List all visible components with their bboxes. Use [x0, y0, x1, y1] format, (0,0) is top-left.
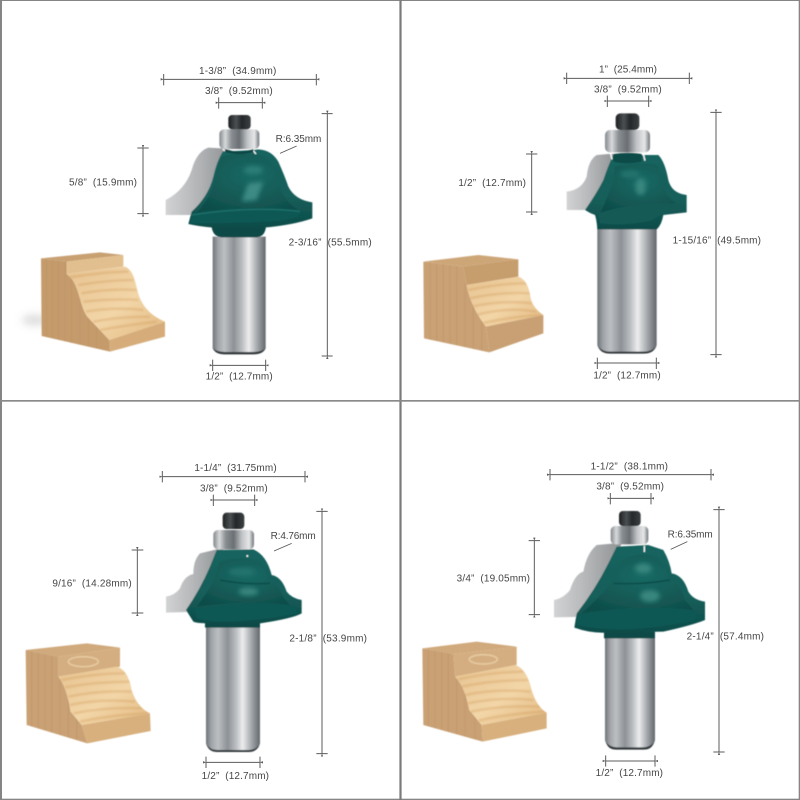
overall width dimension: [567, 64, 689, 84]
wood sample: [26, 643, 151, 745]
panel: top-left router bit: [22, 66, 372, 383]
bearing dimension: 3/8” (9.52mm): [205, 86, 273, 97]
wood sample: [22, 252, 165, 352]
bearing dimension: 3/8” (9.52mm): [200, 483, 268, 494]
cut height dimension: 1/2” (12.7mm): [458, 178, 526, 189]
cut height dimension: [457, 541, 540, 615]
bearing dimension: 3/8” (9.52mm): [596, 482, 664, 493]
bearing dimension: [205, 86, 273, 109]
panel: top-right router bit: [423, 64, 761, 381]
overall width dimension: [550, 461, 711, 480]
router bit: [567, 113, 687, 354]
bearing dimension: [596, 482, 664, 504]
total height dimension: [289, 114, 372, 356]
overall width dimension: [164, 66, 316, 85]
radius callout: R:6.35mm: [668, 529, 713, 540]
panel: bottom-left router bit: [26, 463, 367, 782]
cut height dimension: 5/8” (15.9mm): [69, 177, 137, 188]
shank dimension: 1/2” (12.7mm): [593, 370, 661, 381]
cut height dimension: 3/4” (19.05mm): [457, 574, 530, 585]
overall width dimension: 1” (25.4mm): [599, 64, 657, 75]
router bit: [554, 511, 705, 750]
radius callout: [668, 529, 713, 549]
total height dimension: [673, 112, 761, 355]
cut height dimension: [458, 154, 537, 212]
panel: bottom-right router bit: [422, 461, 764, 779]
cut height dimension: 9/16” (14.28mm): [52, 578, 132, 589]
total height dimension: 2-1/4” (57.4mm): [687, 632, 764, 643]
radius callout: [271, 531, 316, 551]
radius callout: R:6.35mm: [276, 134, 321, 145]
router bit: [166, 513, 302, 752]
radius callout: [276, 134, 321, 153]
overall width dimension: 1-1/2” (38.1mm): [591, 461, 668, 472]
shank dimension: 1/2” (12.7mm): [202, 771, 269, 782]
shank dimension: 1/2” (12.7mm): [206, 372, 273, 383]
shank dimension: [593, 358, 661, 381]
total height dimension: 1-15/16” (49.5mm): [673, 236, 761, 247]
overall width dimension: 1-3/8” (34.9mm): [199, 66, 276, 77]
total height dimension: 2-1/8” (53.9mm): [289, 633, 367, 644]
bearing dimension: 3/8” (9.52mm): [594, 84, 662, 95]
shank dimension: [206, 360, 273, 383]
bearing dimension: [594, 84, 662, 107]
shank dimension: [202, 757, 269, 782]
total height dimension: [289, 511, 367, 754]
total height dimension: 2-3/16” (55.5mm): [289, 238, 372, 249]
router bit: [166, 115, 312, 354]
wood sample: [422, 642, 547, 743]
overall width dimension: 1-1/4” (31.75mm): [194, 463, 277, 474]
bearing dimension: [200, 483, 268, 506]
total height dimension: [687, 510, 764, 752]
shank dimension: 1/2” (12.7mm): [596, 768, 663, 779]
radius callout: R:4.76mm: [271, 531, 316, 542]
wood sample: [423, 255, 543, 352]
shank dimension: [596, 755, 663, 779]
overall width dimension: [162, 463, 305, 482]
cut height dimension: [69, 148, 149, 214]
cut height dimension: [52, 550, 143, 613]
